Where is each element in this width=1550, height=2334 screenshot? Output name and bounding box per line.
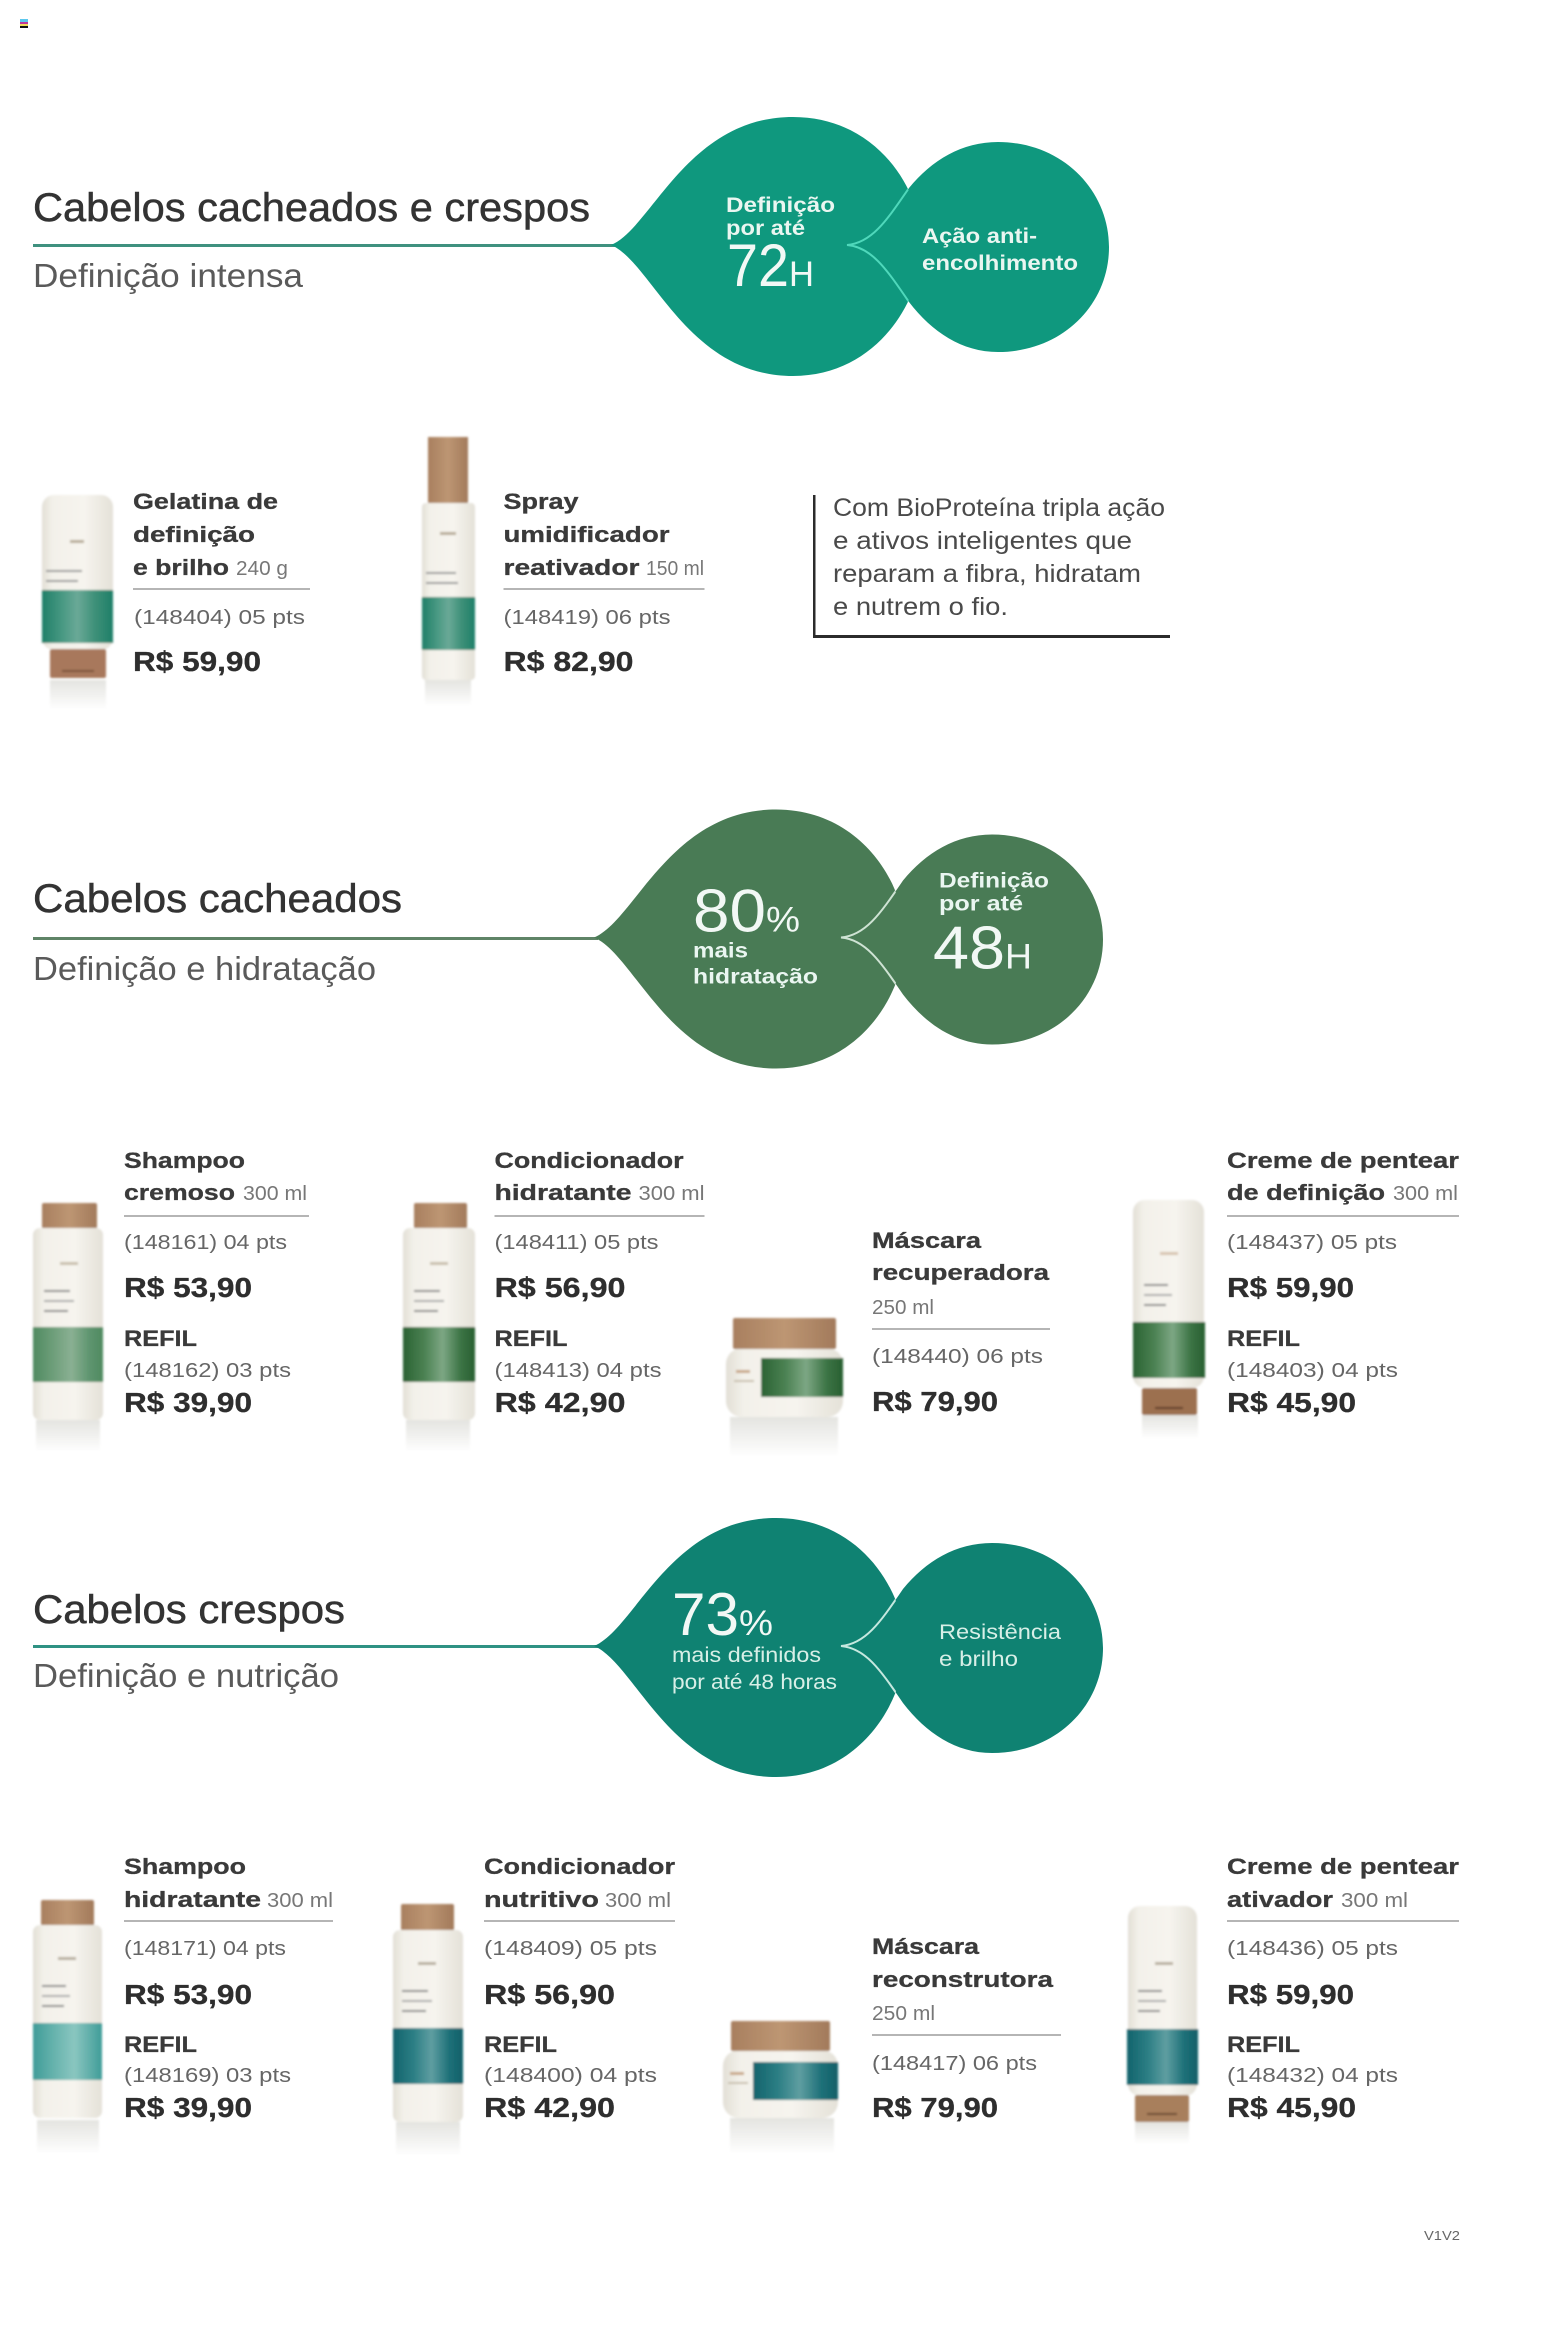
product: condicionador hidratante: 300 ml bbox=[638, 1183, 704, 1205]
product: shampoo hidratante: R$ 53,90 bbox=[124, 1979, 252, 2010]
product: spray bbox=[422, 437, 704, 706]
product: condicionador hidratante: hidratante bbox=[494, 1180, 632, 1205]
product: shampoo cremoso: 300 ml bbox=[243, 1183, 307, 1205]
badge: section 2: H bbox=[1005, 938, 1032, 976]
product: condicionador hidratante bbox=[403, 1148, 704, 1452]
badge: section 1: por até bbox=[726, 217, 805, 240]
product: máscara reconstrutora: reconstrutora bbox=[872, 1967, 1054, 1992]
product: shampoo hidratante: (148169) 03 pts bbox=[124, 2065, 291, 2087]
badge: section 3: mais definidos bbox=[672, 1644, 821, 1667]
badge: section 1 bbox=[611, 117, 1109, 376]
product: creme de pentear de definição: R$ 45,90 bbox=[1227, 1387, 1356, 1418]
product: shampoo hidratante: R$ 39,90 bbox=[124, 2092, 252, 2123]
badge: section 1: encolhimento bbox=[922, 252, 1078, 275]
product: creme de pentear de definição: Creme de pentear bbox=[1227, 1148, 1460, 1173]
heading: section 1: Cabelos cacheados e crespos bbox=[33, 186, 590, 230]
heading: section 2: Cabelos cacheados bbox=[33, 877, 402, 921]
product: creme de pentear ativador: 300 ml bbox=[1341, 1890, 1408, 1912]
product: máscara reconstrutora: 250 ml bbox=[872, 2003, 935, 2025]
product: gelatina bbox=[42, 489, 310, 710]
product: condicionador hidratante: (148411) 05 pts bbox=[494, 1232, 658, 1254]
callout: bioproteína bbox=[813, 494, 1170, 638]
product: máscara recuperadora bbox=[726, 1228, 1050, 1457]
footer code: V1V2 bbox=[1424, 2228, 1460, 2243]
product: máscara recuperadora: Máscara bbox=[872, 1228, 982, 1253]
badge: section 3: 73 bbox=[672, 1581, 739, 1648]
callout: bioproteína: reparam a fibra, hidratam bbox=[833, 560, 1141, 588]
badge: section 2: por até bbox=[939, 892, 1023, 916]
callout: bioproteína: Com BioProteína tripla ação bbox=[833, 494, 1165, 522]
badge: section 1: H bbox=[789, 255, 814, 294]
product: gelatina: (148404) 05 pts bbox=[134, 607, 305, 629]
product: condicionador hidratante: R$ 56,90 bbox=[494, 1272, 626, 1303]
product: spray: umidificador bbox=[504, 522, 670, 547]
badge: section 3: % bbox=[739, 1604, 773, 1643]
product: shampoo cremoso: REFIL bbox=[124, 1326, 197, 1351]
badge: section 2 bbox=[594, 810, 1103, 1068]
product: condicionador nutritivo bbox=[393, 1854, 676, 2156]
callout: bioproteína: e ativos inteligentes que bbox=[833, 527, 1132, 555]
product: spray: R$ 82,90 bbox=[504, 646, 634, 677]
product: condicionador nutritivo: REFIL bbox=[484, 2032, 557, 2057]
product: creme de pentear ativador: (148432) 04 pts bbox=[1227, 2065, 1398, 2087]
rule: section 2 bbox=[33, 937, 598, 940]
product: máscara reconstrutora bbox=[723, 1934, 1061, 2154]
badge: section 3: Resistência bbox=[939, 1621, 1061, 1644]
product: spray: (148419) 06 pts bbox=[504, 607, 670, 629]
product: máscara reconstrutora: R$ 79,90 bbox=[872, 2092, 998, 2123]
product: shampoo hidratante: hidratante bbox=[124, 1887, 261, 1912]
product: spray: reativador bbox=[504, 555, 640, 580]
product: shampoo cremoso: (148161) 04 pts bbox=[124, 1232, 287, 1254]
product: shampoo hidratante bbox=[33, 1854, 333, 2154]
product: creme de pentear ativador: R$ 45,90 bbox=[1227, 2092, 1356, 2123]
product: shampoo hidratante: REFIL bbox=[124, 2032, 197, 2057]
badge: section 3: e brilho bbox=[939, 1648, 1018, 1671]
badge: section 3 bbox=[594, 1518, 1103, 1777]
badge: section 2: % bbox=[766, 900, 800, 940]
badge: section 2: hidratação bbox=[693, 966, 818, 988]
panel: cabelos cacheados e crespos bbox=[33, 117, 1170, 710]
product: creme de pentear ativador: ativador bbox=[1227, 1887, 1334, 1912]
heading: section 3: Cabelos crespos bbox=[33, 1588, 345, 1632]
product: spray: Spray bbox=[504, 489, 579, 514]
panel: cabelos cacheados bbox=[33, 810, 1460, 1457]
product: condicionador hidratante: (148413) 04 pts bbox=[494, 1360, 662, 1382]
product: gelatina: R$ 59,90 bbox=[133, 646, 261, 677]
badge: section 3: por até 48 horas bbox=[672, 1671, 837, 1694]
badge: section 2: Definição bbox=[939, 870, 1049, 892]
badge: section 1: Ação anti- bbox=[922, 225, 1037, 248]
product: creme de pentear de definição bbox=[1133, 1148, 1460, 1439]
product: gelatina: 240 g bbox=[236, 558, 288, 580]
product: creme de pentear ativador bbox=[1127, 1854, 1460, 2144]
product: máscara recuperadora: (148440) 06 pts bbox=[872, 1346, 1043, 1368]
product: condicionador hidratante: REFIL bbox=[494, 1326, 568, 1351]
subheading: section 2: Definição e hidratação bbox=[33, 950, 376, 987]
product: condicionador nutritivo: R$ 56,90 bbox=[484, 1979, 615, 2010]
badge: section 1: Definição bbox=[726, 194, 835, 217]
product: máscara reconstrutora: (148417) 06 pts bbox=[872, 2053, 1037, 2075]
product: creme de pentear ativador: R$ 59,90 bbox=[1227, 1979, 1354, 2010]
product: condicionador nutritivo: R$ 42,90 bbox=[484, 2092, 615, 2123]
panel: cabelos crespos bbox=[33, 1518, 1460, 2156]
product: máscara recuperadora: R$ 79,90 bbox=[872, 1386, 998, 1417]
rule: section 1 bbox=[33, 244, 615, 247]
product: shampoo hidratante: Shampoo bbox=[124, 1854, 246, 1879]
callout: bioproteína: e nutrem o fio. bbox=[833, 593, 1008, 621]
product: gelatina: definição bbox=[133, 522, 255, 547]
product: shampoo hidratante: 300 ml bbox=[267, 1890, 333, 1912]
product: condicionador nutritivo: nutritivo bbox=[484, 1887, 599, 1912]
product: máscara recuperadora: 250 ml bbox=[872, 1297, 934, 1319]
product: shampoo cremoso bbox=[33, 1148, 309, 1452]
product: shampoo cremoso: R$ 53,90 bbox=[124, 1272, 252, 1303]
product: máscara reconstrutora: Máscara bbox=[872, 1934, 980, 1959]
product: shampoo cremoso: (148162) 03 pts bbox=[124, 1360, 291, 1382]
badge: section 1: 72 bbox=[727, 232, 789, 299]
product: condicionador nutritivo: (148409) 05 pts bbox=[484, 1938, 657, 1960]
product: creme de pentear de definição: 300 ml bbox=[1393, 1183, 1458, 1205]
product: condicionador hidratante: Condicionador bbox=[494, 1148, 684, 1173]
product: creme de pentear de definição: (148437) 05 pts bbox=[1227, 1232, 1397, 1254]
product: creme de pentear ativador: REFIL bbox=[1227, 2032, 1300, 2057]
subheading: section 1: Definição intensa bbox=[33, 257, 304, 294]
product: creme de pentear de definição: R$ 59,90 bbox=[1227, 1272, 1354, 1303]
product: condicionador nutritivo: Condicionador bbox=[484, 1854, 676, 1879]
product: shampoo cremoso: Shampoo bbox=[124, 1148, 245, 1173]
product: condicionador nutritivo: 300 ml bbox=[605, 1890, 671, 1912]
badge: section 2: 48 bbox=[933, 914, 1005, 982]
product: gelatina: Gelatina de bbox=[133, 489, 278, 514]
product: shampoo cremoso: R$ 39,90 bbox=[124, 1387, 252, 1418]
product: creme de pentear ativador: Creme de pentear bbox=[1227, 1854, 1460, 1879]
product: spray: 150 ml bbox=[646, 558, 704, 580]
badge: section 2: 80 bbox=[693, 878, 766, 944]
product: condicionador hidratante: R$ 42,90 bbox=[494, 1387, 626, 1418]
badge: section 2: mais bbox=[693, 940, 748, 962]
icon: print colour marker bbox=[20, 19, 28, 28]
product: creme de pentear ativador: (148436) 05 pts bbox=[1227, 1938, 1398, 1960]
product: gelatina: e brilho bbox=[133, 555, 229, 580]
subheading: section 3: Definição e nutrição bbox=[33, 1657, 339, 1694]
product: condicionador nutritivo: (148400) 04 pts bbox=[484, 2065, 657, 2087]
product: shampoo hidratante: (148171) 04 pts bbox=[124, 1938, 286, 1960]
rule: section 3 bbox=[33, 1645, 598, 1648]
product: creme de pentear de definição: (148403) 04 pts bbox=[1227, 1360, 1398, 1382]
product: máscara recuperadora: recuperadora bbox=[872, 1260, 1050, 1285]
product: shampoo cremoso: cremoso bbox=[124, 1180, 235, 1205]
product: creme de pentear de definição: REFIL bbox=[1227, 1326, 1300, 1351]
product: creme de pentear de definição: de definição bbox=[1227, 1180, 1385, 1205]
